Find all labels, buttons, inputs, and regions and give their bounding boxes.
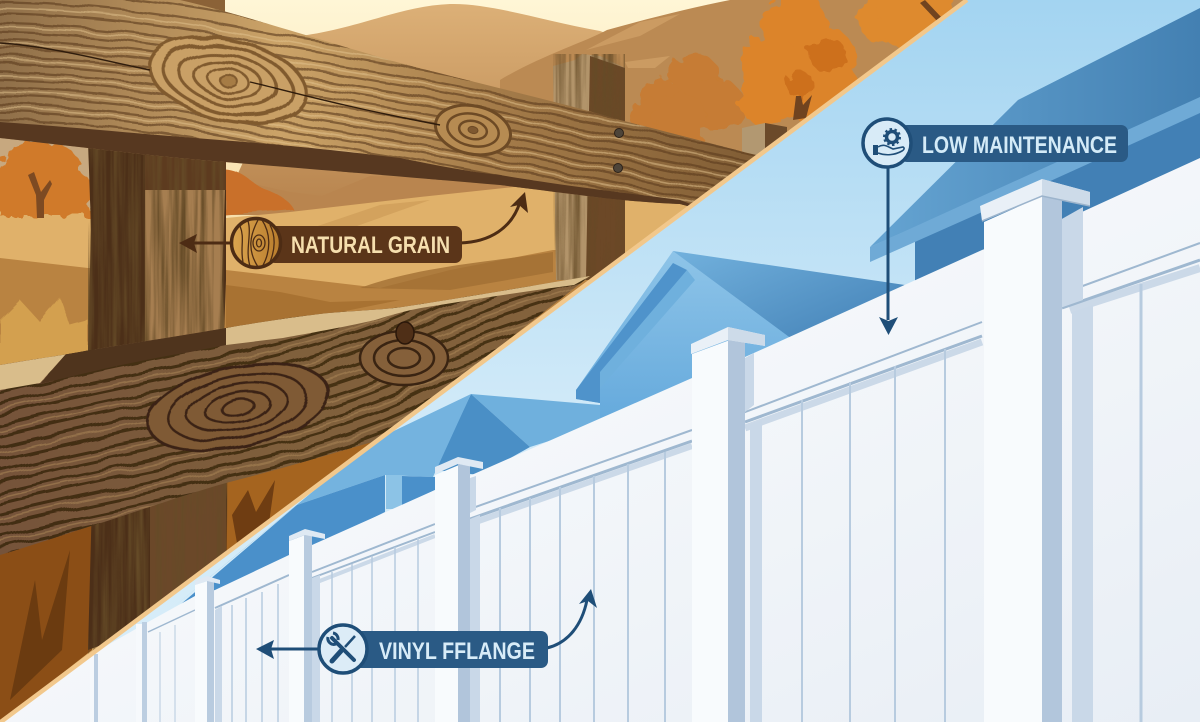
- ring knot with dark eye: [360, 322, 448, 385]
- panel board lines: [160, 284, 1141, 722]
- post 3: [435, 457, 483, 722]
- golden field: [0, 187, 688, 677]
- rail crack: [0, 43, 440, 125]
- left fence post: [88, 0, 228, 665]
- fence panels: [0, 158, 1200, 722]
- autumn sky: [90, 0, 730, 218]
- nails: [614, 128, 624, 172]
- lower wooden rail: [0, 276, 590, 555]
- post 5: [195, 576, 220, 722]
- label pill: [268, 226, 462, 263]
- shaded panel columns: [215, 207, 1093, 722]
- post 2: [691, 327, 765, 722]
- grass tufts: [0, 200, 553, 722]
- distant hills: [0, 0, 964, 215]
- arrow: to panel: [879, 165, 898, 335]
- small knot: [434, 104, 512, 156]
- icon: wrench and screwdriver: [319, 625, 367, 673]
- vinyl fence body: [0, 158, 1200, 722]
- lower knot: [146, 362, 330, 453]
- rail undershadow: [312, 268, 1200, 584]
- house roof right: [870, 8, 1200, 282]
- tree: left orange tree: [0, 139, 92, 218]
- arrow: to left: [256, 640, 323, 659]
- label text: LOW MAINTENANCE: [922, 132, 1117, 159]
- post 1: [980, 179, 1090, 722]
- label pill: [900, 125, 1128, 162]
- house roof middle: [576, 251, 905, 425]
- label pill: [350, 631, 548, 668]
- house roof far: [182, 394, 600, 604]
- icon: hand with gear: [863, 119, 911, 167]
- upper rail grain: [0, 0, 756, 205]
- callout: natural grain: [179, 192, 528, 268]
- post 4: [289, 529, 325, 722]
- bush behind post: [226, 170, 294, 216]
- label text: NATURAL GRAIN: [291, 232, 450, 259]
- rail underside shadow: [0, 122, 690, 206]
- lower rail sunlit edge: [226, 275, 592, 345]
- icon: wood grain: [232, 218, 280, 268]
- post 6 and 7: [90, 622, 147, 722]
- lower rail grain: [0, 279, 586, 554]
- label text: VINYL FFLANGE: [379, 638, 535, 665]
- upper wooden rail: [0, 0, 756, 206]
- arrow: to post: [179, 234, 235, 253]
- trees: right orange trees: [630, 0, 954, 144]
- panel rails: [148, 243, 1200, 632]
- callout: low maintenance: [863, 119, 1128, 335]
- small distant post: [742, 123, 787, 155]
- right fence post: [553, 54, 625, 280]
- post shadow on rail: [40, 328, 226, 384]
- darker foreground meadow: [0, 250, 588, 345]
- arrow: to board: [547, 589, 597, 648]
- arrow: to rail: [460, 192, 528, 243]
- callout: vinyl flange: [256, 589, 597, 673]
- large knot: [148, 35, 308, 126]
